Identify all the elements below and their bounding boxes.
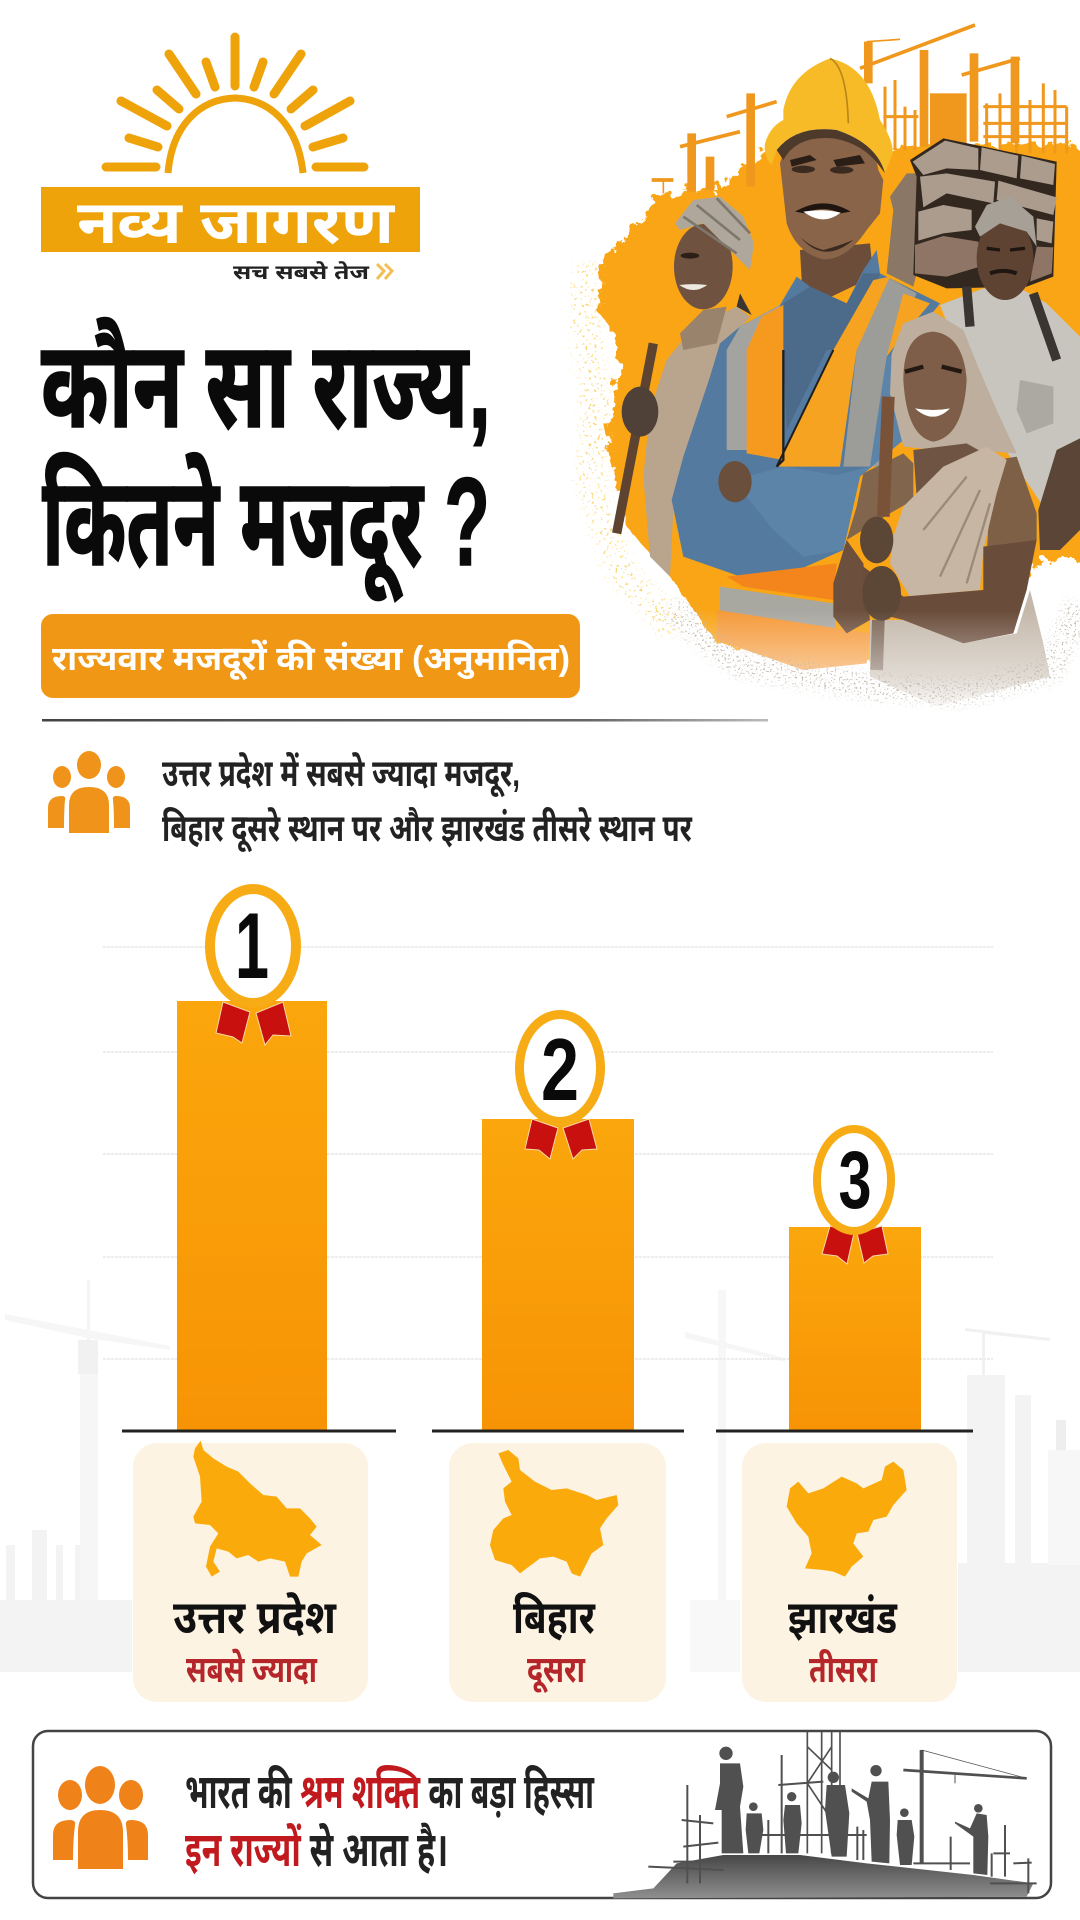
- title: [41, 317, 491, 602]
- rank label: तीसरा: [809, 1649, 878, 1690]
- fade of figures into white: [663, 610, 1080, 713]
- map: Uttar Pradesh: [193, 1441, 322, 1577]
- brand name: नव्य जागरण: [77, 189, 396, 256]
- medal 2: [520, 1014, 600, 1159]
- silhouette: construction workers on scaffolding: [613, 1732, 1037, 1898]
- bar: Uttar Pradesh: [177, 1001, 327, 1430]
- rank label: सबसे ज्यादा: [186, 1648, 318, 1690]
- paint speckles: [583, 263, 677, 630]
- bar: Jharkhand: [789, 1227, 921, 1430]
- medal 3: 3: [838, 1135, 872, 1226]
- worker: centre man with helmet and vest: [672, 58, 940, 670]
- worker: right man carrying bricks: [887, 138, 1080, 550]
- state name: झारखंड: [788, 1591, 898, 1643]
- grey dust speckles: [670, 603, 1080, 693]
- callout line 1: भारत की श्रम शक्ति का बड़ा हिस्सा: [185, 1764, 595, 1819]
- icon: people: [48, 751, 130, 833]
- brick stack: [910, 138, 1057, 288]
- brand band: [41, 187, 420, 252]
- state card: Jharkhand: [742, 1443, 957, 1702]
- rank label: दूसरा: [527, 1649, 586, 1693]
- state card: Uttar Pradesh: [133, 1441, 368, 1702]
- tagline: सच सबसे तेज: [233, 260, 371, 284]
- medal 1: [210, 889, 296, 1045]
- icon: chevrons: [377, 264, 392, 279]
- title line 2: कितने मजदूर ?: [42, 452, 490, 602]
- subtitle pill: राज्यवार मजदूरों की संख्या (अनुमानित): [52, 639, 570, 681]
- state name: बिहार: [513, 1591, 596, 1643]
- icon: people: [53, 1766, 148, 1869]
- title line 1: कौन सा राज्य,: [41, 317, 491, 453]
- state name: उत्तर प्रदेश: [173, 1590, 337, 1643]
- callout line 2: इन राज्यों से आता है।: [185, 1822, 448, 1877]
- worker: woman with sari and stick: [833, 312, 1050, 707]
- background: faint construction skyline: [0, 1280, 1080, 1672]
- medal 1: 1: [235, 893, 269, 998]
- map: Jharkhand: [787, 1462, 907, 1577]
- head: [780, 132, 883, 259]
- medal 2: 2: [541, 1020, 579, 1119]
- logo: rising sun with brand band: [41, 37, 420, 284]
- intro note: [48, 751, 693, 853]
- bottom callout panel: [33, 1731, 1051, 1898]
- bar chart: workers by state: [122, 889, 973, 1431]
- subtitle pill: [41, 614, 580, 698]
- intro line 1: उत्तर प्रदेश में सबसे ज्यादा मजदूर,: [162, 751, 520, 798]
- hard hat: [765, 58, 893, 173]
- orange paint splash: [597, 143, 1080, 660]
- icon: sun rays: [106, 37, 364, 173]
- medal 3: [817, 1129, 891, 1264]
- bar: Bihar: [482, 1119, 634, 1430]
- state card: Bihar: [449, 1443, 666, 1702]
- worker: left man with turban and stick: [617, 197, 754, 577]
- hero illustration: four workers on an orange splash with cranes: [583, 25, 1080, 713]
- intro line 2: बिहार दूसरे स्थान पर और झारखंड तीसरे स्थान पर: [162, 806, 693, 853]
- skyline of cranes and scaffolding: [652, 25, 1067, 193]
- map: Bihar: [490, 1450, 618, 1577]
